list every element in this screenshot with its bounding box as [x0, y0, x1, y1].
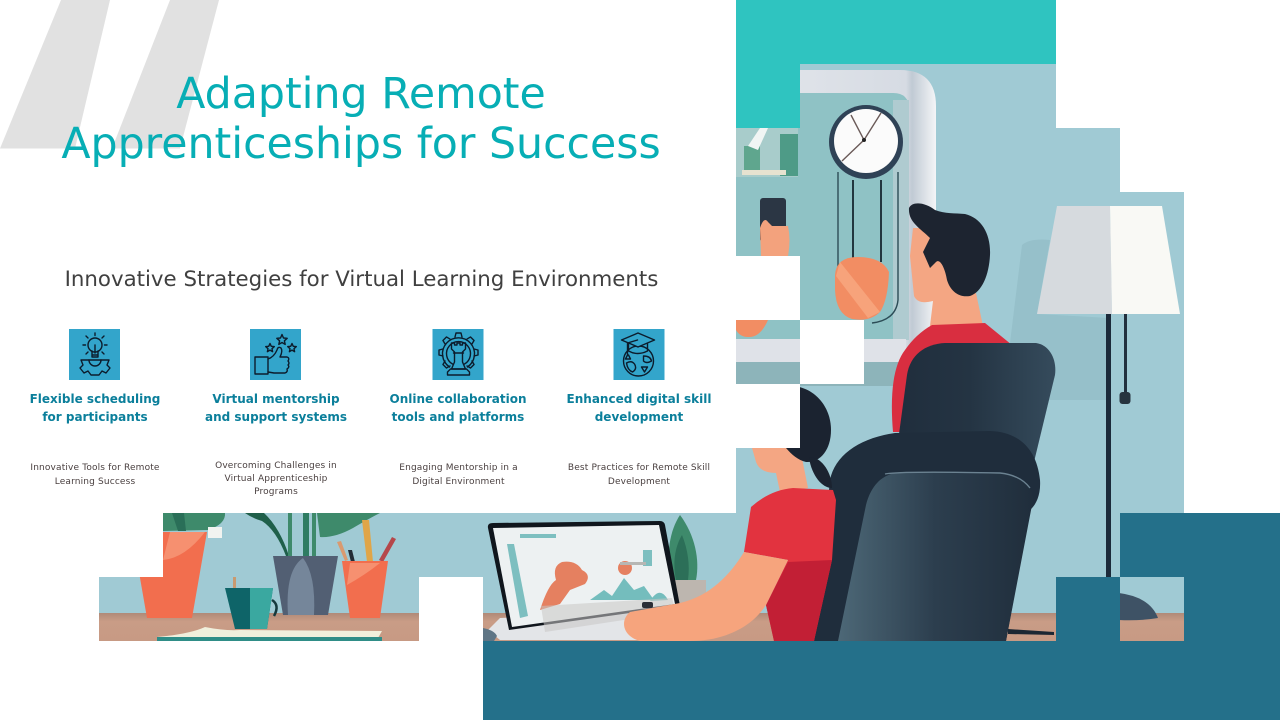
- man sitting: [892, 203, 1012, 432]
- description: Development: [608, 477, 670, 487]
- card 3: online collaboration: [390, 329, 526, 487]
- description: Programs: [254, 487, 298, 497]
- description: Engaging Mentorship in a: [399, 463, 518, 473]
- lower office chair: [814, 431, 1040, 641]
- laptop: [488, 521, 700, 640]
- title: Apprenticeships for Success: [61, 119, 661, 169]
- card 4: digital skills: [567, 329, 711, 487]
- desk: [99, 613, 1184, 641]
- grey potted plant: [245, 513, 380, 615]
- card 1: flexible scheduling: [30, 329, 160, 487]
- woman with laptop: [624, 386, 836, 641]
- title: Adapting Remote: [176, 69, 546, 119]
- description: Overcoming Challenges in: [215, 461, 337, 471]
- description: Innovative Tools for Remote: [30, 463, 160, 473]
- heading: for participants: [42, 410, 148, 424]
- icon: lightbulb and gear: [69, 329, 120, 380]
- orange fragment: [736, 320, 768, 337]
- object on desk edge: [483, 628, 497, 641]
- upper office chair: [899, 343, 1055, 462]
- description: Learning Success: [55, 477, 135, 487]
- desk item by chair: [1008, 629, 1054, 635]
- description: Digital Environment: [412, 477, 505, 487]
- plant behind laptop: [669, 515, 706, 612]
- icon: thumbs up and stars: [250, 329, 301, 380]
- heading: Virtual mentorship: [212, 392, 340, 406]
- description: Virtual Apprenticeship: [224, 474, 328, 484]
- orange potted plant: [132, 513, 225, 618]
- subtitle: Innovative Strategies for Virtual Learning Environments: [65, 267, 658, 292]
- heading: tools and platforms: [392, 410, 524, 424]
- icon: globe with graduation cap: [614, 329, 664, 380]
- floor lamp: [1037, 206, 1180, 620]
- card 2: virtual mentorship: [205, 329, 347, 497]
- clock with pendulum: [829, 105, 903, 323]
- heading: Online collaboration: [390, 392, 526, 406]
- heading: development: [595, 410, 684, 424]
- teal block top right: [736, 0, 1056, 128]
- picture on the window wall: [736, 128, 798, 177]
- heading: Enhanced digital skill: [567, 392, 711, 406]
- dark teal base blocks: [483, 513, 1280, 720]
- description: Best Practices for Remote Skill: [568, 463, 710, 473]
- heading: and support systems: [205, 410, 347, 424]
- pens in orange cup: [337, 520, 396, 618]
- window with frame: [736, 70, 936, 386]
- icon: gear and chess rook: [432, 329, 484, 380]
- decorative quote marks: [0, 0, 219, 148]
- phone in hand: [760, 198, 790, 256]
- wall background: [99, 64, 1184, 641]
- heading: Flexible scheduling: [30, 392, 160, 406]
- teal coffee cup: [225, 577, 277, 629]
- illustration: remote workers at a home office: [99, 64, 1184, 641]
- open notebook: [157, 627, 382, 641]
- lamp shadow on wall: [1010, 240, 1106, 400]
